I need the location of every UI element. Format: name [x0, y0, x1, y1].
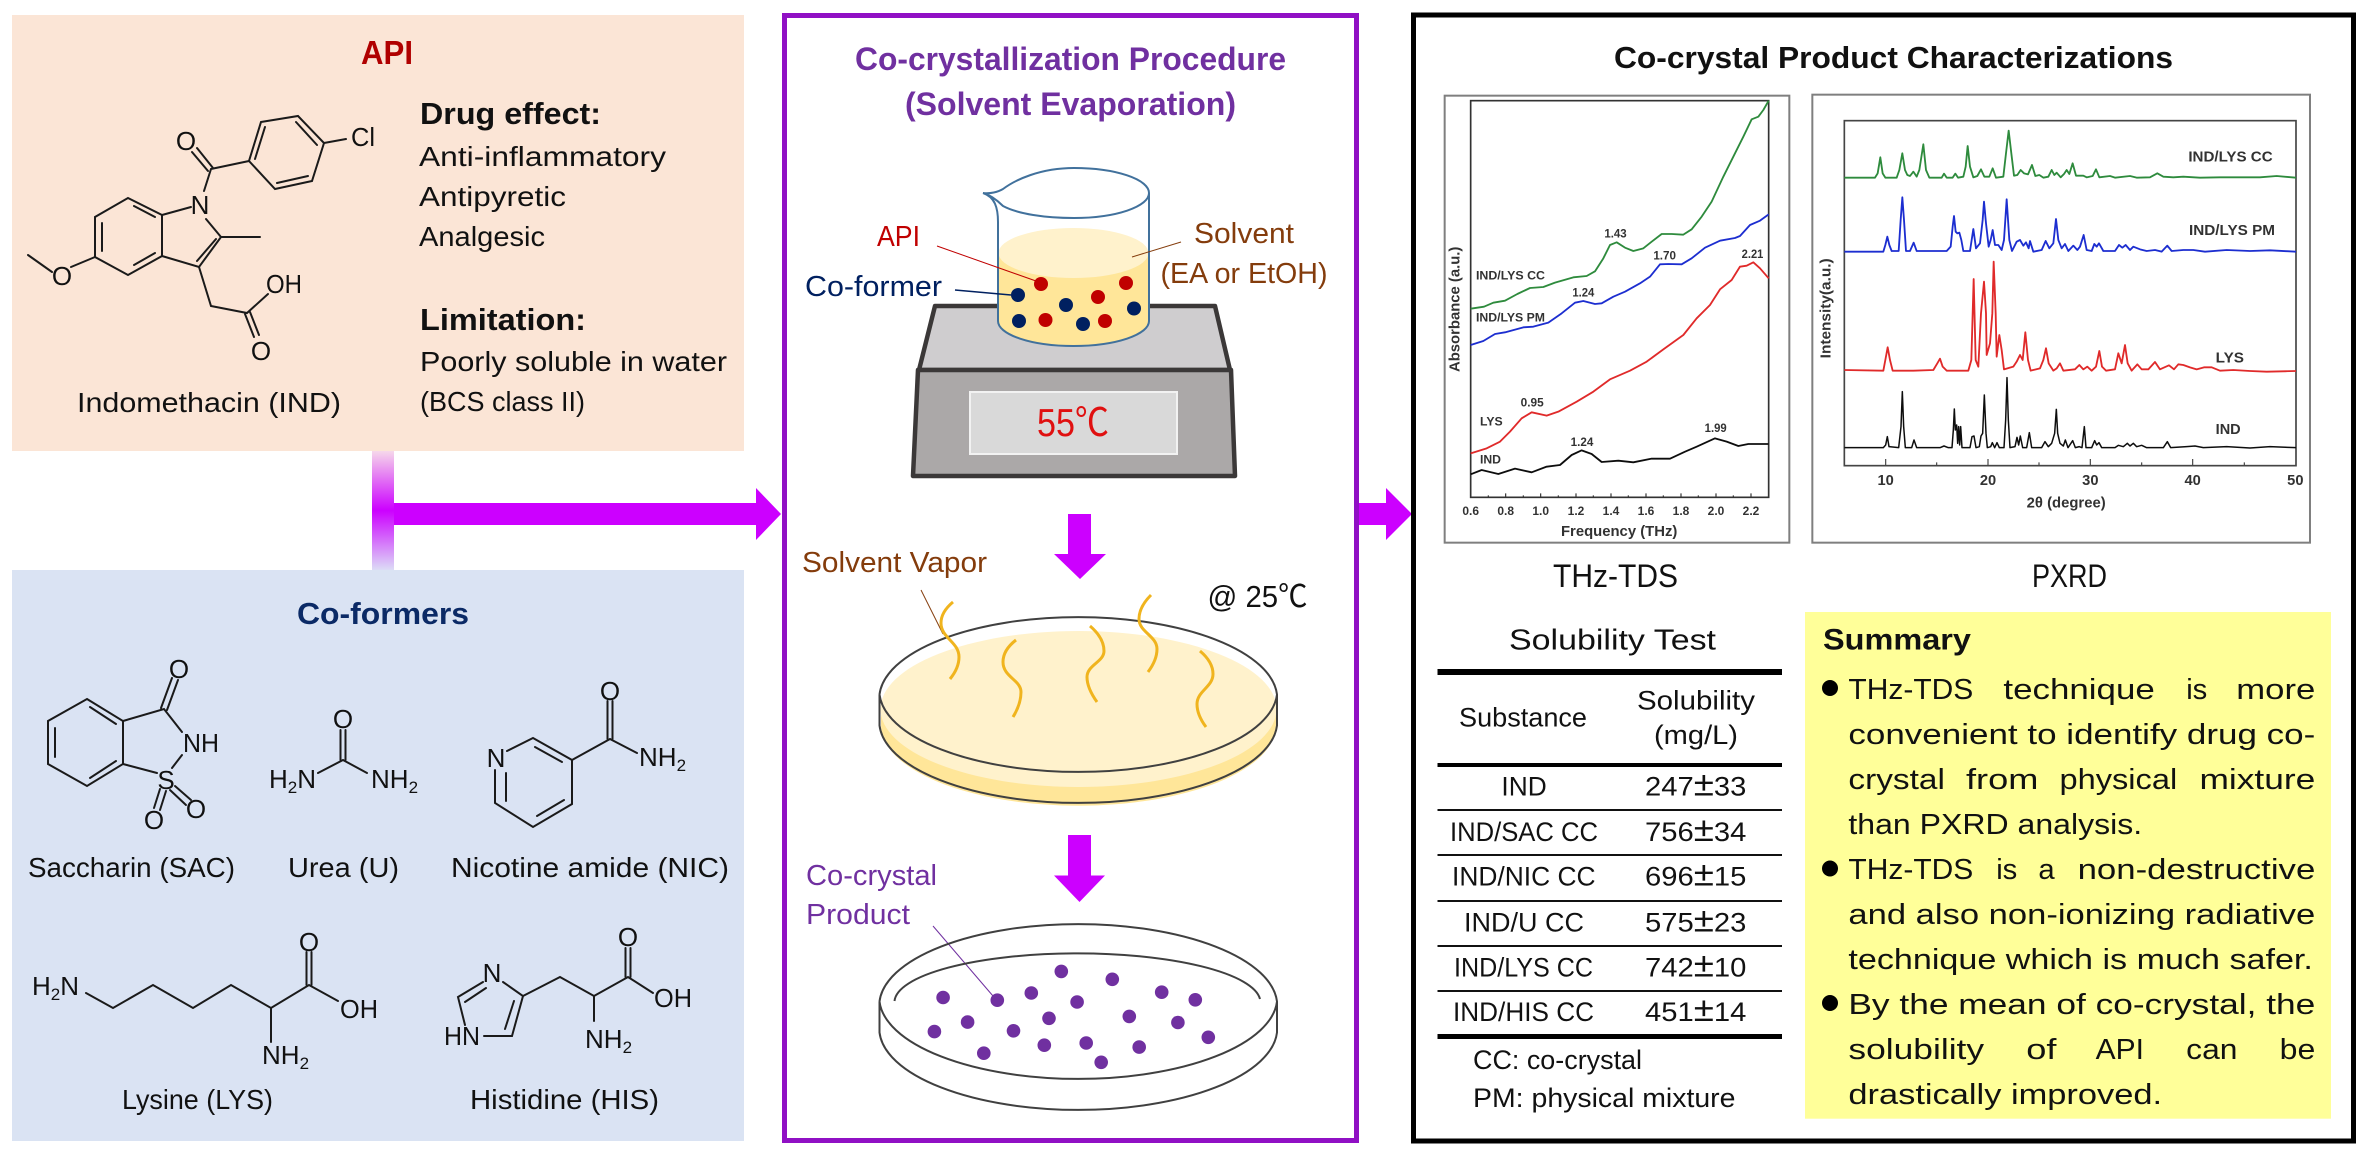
- table: solubility test: 575±23: [1645, 902, 1746, 940]
- bullet 1: from: [1966, 764, 2038, 796]
- chart: THz-TDS: 1.99: [1705, 422, 1727, 435]
- chart: THz-TDS: 1.43: [1604, 228, 1627, 241]
- molecule: histidine: [444, 922, 692, 1057]
- arrow: inputs to procedure: [394, 488, 781, 540]
- molecule: urea: [269, 704, 418, 797]
- molecule: histidine: OH: [654, 983, 692, 1013]
- arrow: down to evaporation: [1054, 514, 1106, 579]
- chart: PXRD: Intensity(a.u.): [1819, 258, 1835, 358]
- table: solubility test: 696±15: [1645, 856, 1746, 894]
- heading: solubility test: Solubility Test: [1509, 624, 1716, 656]
- icon: evaporating dish: [880, 595, 1277, 806]
- callout: solvent: (EA or EtOH): [1160, 258, 1328, 290]
- molecule: urea: 2: [288, 778, 297, 797]
- icon: hot plate: [913, 306, 1235, 476]
- table: solubility test: Substance: [1459, 702, 1587, 732]
- table: solubility test: IND: [1501, 771, 1547, 801]
- panel: API: [12, 15, 744, 451]
- table: solubility test: 742±10: [1645, 946, 1746, 984]
- chart: THz-TDS: 1.2: [1568, 505, 1585, 518]
- molecule: histidine: N: [483, 958, 501, 988]
- molecule: nicotinamide: NH: [639, 742, 677, 772]
- chart: PXRD: 50: [2287, 473, 2303, 489]
- bullet 1: crystal: [1848, 764, 1945, 796]
- molecule: lysine: NH: [262, 1040, 300, 1070]
- bullet 2: THz-TDS: [1848, 854, 1973, 886]
- panel: co-crystallization procedure: [784, 16, 1356, 1140]
- chart: PXRD: 20: [1980, 473, 1996, 489]
- table: solubility test: (mg/L): [1654, 720, 1738, 750]
- chart: PXRD: [1812, 95, 2310, 543]
- molecule: lysine: H: [32, 971, 51, 1001]
- icon: beaker: [983, 168, 1149, 346]
- chart: THz-TDS: 1.0: [1532, 505, 1549, 518]
- callout: solvent: [1132, 218, 1328, 290]
- bullet 3: By the mean of co-crystal, the: [1848, 989, 2315, 1021]
- chart: THz-TDS: Frequency (THz): [1561, 524, 1678, 540]
- molecule: nicotinamide: N: [487, 743, 505, 773]
- bullet 1: than PXRD analysis.: [1848, 809, 2142, 841]
- molecule: histidine: NH: [585, 1024, 623, 1054]
- molecule: saccharin: O: [144, 805, 164, 835]
- text block: drug effect: Drug effect:: [420, 96, 601, 131]
- panel: co-formers: [12, 570, 744, 1141]
- label: urea: Urea (U): [288, 852, 399, 883]
- molecule: indomethacin: Cl: [351, 122, 375, 152]
- chart: PXRD: 2θ (degree): [2027, 495, 2106, 511]
- callout: solvent: Solvent: [1194, 218, 1294, 250]
- molecule: lysine: [32, 927, 378, 1073]
- chart: THz-TDS: Absorbance (a.u.): [1447, 246, 1463, 372]
- chart: PXRD: 10: [1878, 473, 1894, 489]
- table: solubility test: IND/NIC CC: [1452, 862, 1596, 892]
- table: solubility test: IND/SAC CC: [1450, 817, 1598, 847]
- molecule: lysine: 2: [51, 985, 60, 1004]
- molecule: saccharin: [48, 654, 219, 835]
- chart: THz-TDS: [1445, 96, 1789, 543]
- molecule: nicotinamide: [487, 676, 686, 827]
- bullet 1: mixture: [2200, 764, 2315, 796]
- molecule: histidine: O: [618, 922, 638, 952]
- chart: PXRD: 30: [2082, 473, 2098, 489]
- callout: API: API: [877, 221, 920, 253]
- molecule: urea: 2: [409, 778, 418, 797]
- note: abbreviations: [1473, 1045, 1736, 1113]
- chart: THz-TDS: 1.6: [1638, 505, 1655, 518]
- molecule: saccharin: O: [169, 654, 189, 684]
- bullet 1: physical: [2060, 764, 2177, 796]
- text block: drug effect: Analgesic: [419, 221, 545, 252]
- table: solubility test: 247±33: [1645, 765, 1746, 803]
- note: abbreviations: PM: physical mixture: [1473, 1083, 1736, 1113]
- molecule: indomethacin: N: [191, 190, 209, 220]
- callout: co-crystal product: Product: [806, 899, 910, 931]
- bullet 1: technique: [2003, 674, 2155, 706]
- callout: co-crystal product: [806, 860, 993, 996]
- bullet 2: [1822, 854, 2315, 976]
- table: solubility test: IND/HIS CC: [1453, 997, 1594, 1027]
- panel: summary: [1805, 612, 2331, 1119]
- chart: PXRD: LYS: [2216, 350, 2244, 366]
- heading: procedure: [855, 41, 1286, 122]
- text block: drug effect: Anti-inflammatory: [419, 141, 666, 172]
- bullet 3: drastically improved.: [1848, 1079, 2162, 1111]
- label: indomethacin: Indomethacin (IND): [77, 387, 341, 418]
- bullet 3: can: [2186, 1034, 2238, 1066]
- text block: drug effect: [419, 96, 666, 252]
- chart: THz-TDS: 0.95: [1521, 397, 1544, 410]
- bullet 3: API: [2096, 1034, 2144, 1066]
- bullet 1: [1822, 674, 2315, 841]
- chart: THz-TDS: 1.8: [1673, 505, 1690, 518]
- heading: procedure: (Solvent Evaporation): [905, 86, 1236, 122]
- chart: THz-TDS: IND/LYS PM: [1476, 311, 1545, 324]
- chart: THz-TDS: 1.24: [1571, 436, 1594, 449]
- label: PXRD: PXRD: [2032, 558, 2107, 594]
- bullet 3: of: [2026, 1034, 2058, 1066]
- molecule: urea: H: [269, 764, 288, 794]
- callout: solvent vapor: [802, 547, 987, 634]
- callout: co-crystal product: Co-crystal: [806, 860, 937, 892]
- table: solubility test: Solubility: [1637, 686, 1756, 716]
- molecule: urea: NH: [371, 764, 409, 794]
- table: solubility test: IND/U CC: [1464, 908, 1584, 938]
- callout: co-former: Co-former: [805, 271, 942, 303]
- text block: limitation: Poorly soluble in water: [420, 346, 727, 377]
- label: nicotinamide: Nicotine amide (NIC): [451, 852, 729, 883]
- callout: co-former: [805, 271, 1011, 303]
- molecule: indomethacin: [28, 116, 375, 366]
- molecule: lysine: O: [299, 927, 319, 957]
- label: lysine: Lysine (LYS): [122, 1084, 273, 1115]
- molecule: indomethacin: OH: [266, 269, 302, 299]
- molecule: saccharin: S: [157, 765, 175, 795]
- molecule: indomethacin: O: [52, 261, 72, 291]
- table: solubility test: 451±14: [1645, 991, 1746, 1029]
- text block: limitation: [420, 302, 727, 417]
- bullet 3: be: [2280, 1034, 2315, 1066]
- molecule: saccharin: NH: [183, 728, 219, 758]
- label: THz-TDS: THz-TDS: [1553, 558, 1678, 594]
- heading: summary: Summary: [1823, 624, 1971, 656]
- bullet 3: solubility: [1848, 1034, 1985, 1066]
- chart: PXRD: 40: [2185, 473, 2201, 489]
- callout: API: [877, 221, 1036, 281]
- chart: THz-TDS: 0.8: [1497, 505, 1515, 518]
- molecule: lysine: 2: [300, 1054, 309, 1073]
- label: 25 degrees: @ 25℃: [1208, 579, 1308, 614]
- heading: procedure: Co-crystallization Procedure: [855, 41, 1286, 77]
- chart: THz-TDS: 1.24: [1572, 287, 1595, 300]
- chart: THz-TDS: 2.2: [1743, 505, 1760, 518]
- molecule: nicotinamide: O: [600, 676, 620, 706]
- label: histidine: Histidine (HIS): [470, 1084, 659, 1115]
- chart: THz-TDS: IND: [1480, 453, 1501, 466]
- icon: hot plate: 55℃: [1037, 402, 1109, 445]
- chart: PXRD: IND: [2216, 422, 2241, 438]
- heading: co-formers: Co-formers: [297, 596, 469, 631]
- bullet 1: is: [2186, 674, 2207, 706]
- table: solubility test: IND/LYS CC: [1454, 952, 1593, 982]
- text block: limitation: Limitation:: [420, 302, 586, 337]
- chart: THz-TDS: 2.0: [1708, 505, 1724, 518]
- bullet 1: more: [2236, 674, 2315, 706]
- chart: THz-TDS: 2.21: [1742, 248, 1764, 261]
- bullet 2: is: [1996, 854, 2017, 886]
- note: abbreviations: CC: co-crystal: [1473, 1045, 1642, 1075]
- bullet 2: technique which is much safer.: [1848, 944, 2313, 976]
- chart: THz-TDS: LYS: [1480, 415, 1503, 428]
- molecule: histidine: 2: [623, 1038, 632, 1057]
- chart: THz-TDS: 0.6: [1462, 505, 1480, 518]
- connector bar between API and co-formers: [372, 451, 394, 570]
- molecule: urea: N: [297, 764, 316, 794]
- text block: drug effect: Antipyretic: [419, 181, 566, 212]
- molecule: saccharin: O: [186, 794, 206, 824]
- label: saccharin: Saccharin (SAC): [28, 852, 235, 883]
- bullet 3: [1822, 989, 2315, 1111]
- heading: API: API: [361, 34, 413, 71]
- bullet 2: and also non-ionizing radiative: [1848, 899, 2315, 931]
- heading: characterizations: Co-crystal Product Characterizations: [1614, 40, 2173, 75]
- bullet 1: THz-TDS: [1848, 674, 1973, 706]
- molecule: histidine: HN: [444, 1021, 480, 1051]
- text block: limitation: (BCS class II): [420, 386, 585, 417]
- molecule: indomethacin: O: [176, 126, 196, 156]
- bullet 2: a: [2038, 854, 2056, 886]
- molecule: lysine: N: [60, 971, 79, 1001]
- chart: THz-TDS: 1.70: [1653, 249, 1676, 262]
- arrow: down to product: [1054, 835, 1105, 902]
- arrow: procedure to characterizations: [1359, 488, 1412, 540]
- table: solubility test: 756±34: [1645, 811, 1746, 849]
- molecule: nicotinamide: 2: [677, 756, 686, 775]
- chart: PXRD: IND/LYS PM: [2189, 223, 2275, 239]
- bullet 2: non-destructive: [2078, 854, 2315, 886]
- molecule: indomethacin: O: [251, 336, 271, 366]
- table: solubility test: [1438, 624, 1782, 1039]
- icon: product dish: [880, 924, 1277, 1110]
- chart: PXRD: IND/LYS CC: [2188, 150, 2273, 166]
- bullet 1: convenient to identify drug co-: [1848, 719, 2315, 751]
- molecule: urea: O: [333, 704, 353, 734]
- chart: THz-TDS: 1.4: [1603, 505, 1620, 518]
- callout: solvent vapor: Solvent Vapor: [802, 547, 987, 579]
- panel: characterizations: [1414, 15, 2354, 1141]
- chart: THz-TDS: IND/LYS CC: [1476, 269, 1546, 282]
- molecule: lysine: OH: [340, 994, 378, 1024]
